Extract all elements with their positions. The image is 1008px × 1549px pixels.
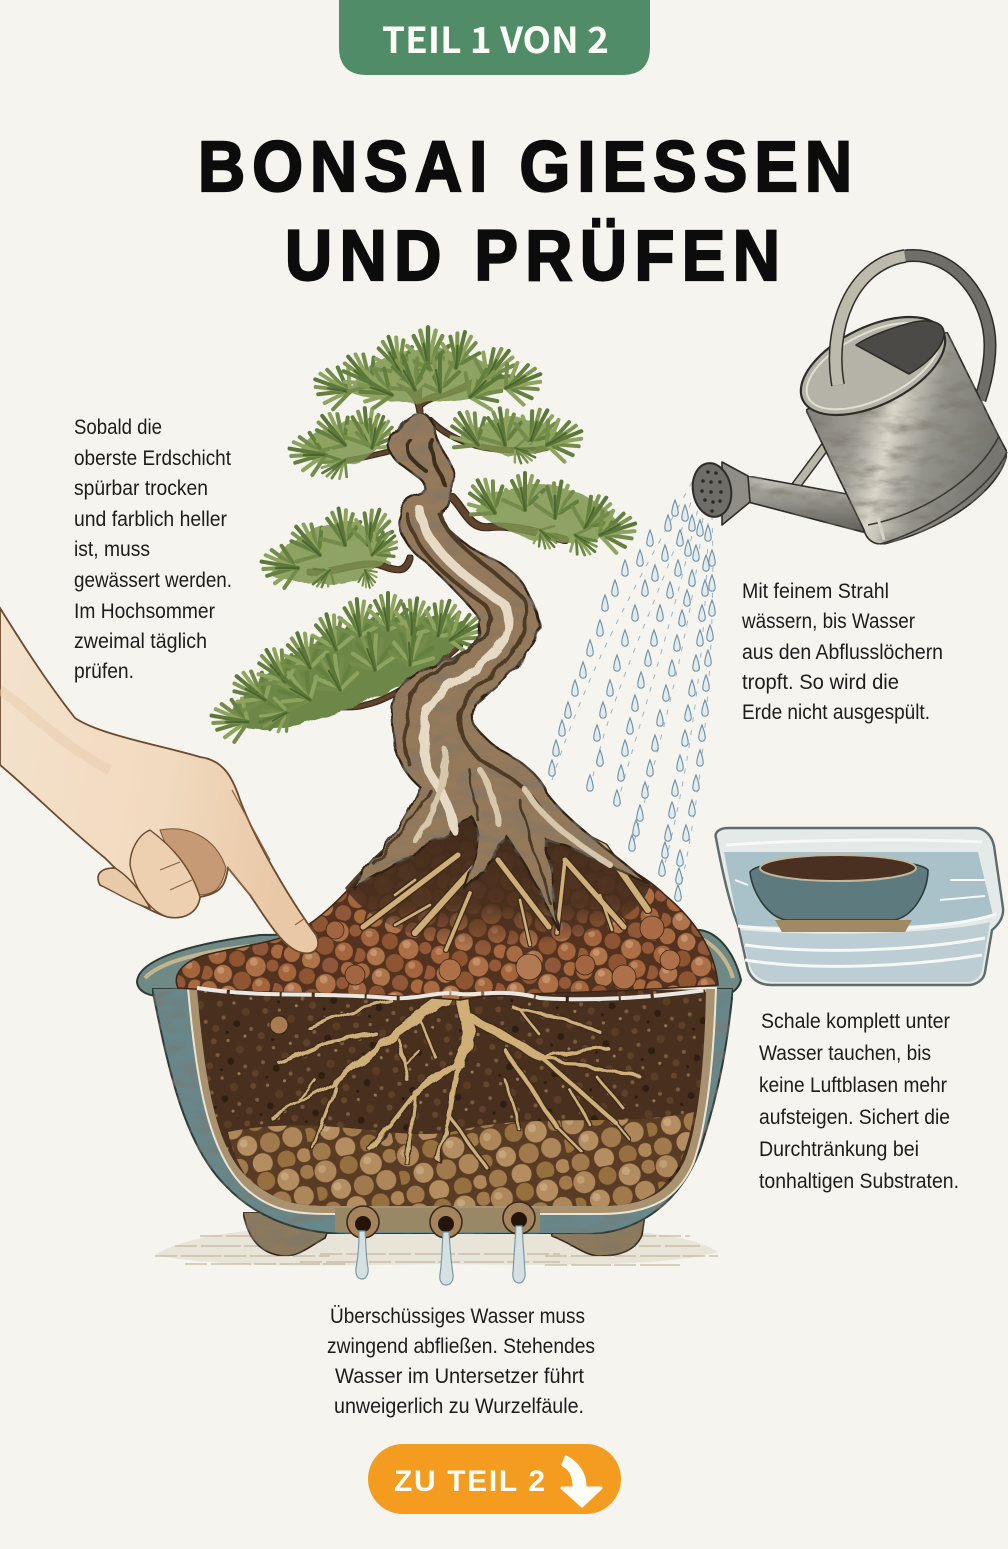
glass tray with small pot xyxy=(716,828,1003,985)
title: BONSAI GIESSEN xyxy=(198,128,852,207)
text block: when to water: Sobald die xyxy=(74,415,162,439)
bonsai tree xyxy=(208,327,650,950)
arrow icon xyxy=(562,1457,601,1506)
text block: when to water: Im Hochsommer xyxy=(74,599,215,623)
text block: immersion xyxy=(759,1009,959,1193)
can rim and opening xyxy=(786,297,960,435)
upper pebble mound xyxy=(176,800,718,1000)
text block: when to water: gewässert werden. xyxy=(74,568,232,592)
trunk bark shading xyxy=(375,440,610,905)
text block: drainage xyxy=(327,1304,595,1418)
header tab xyxy=(339,0,650,75)
text block: drainage: zwingend abfließen. Stehendes xyxy=(327,1334,595,1358)
text block: immersion: tonhaltigen Substraten. xyxy=(759,1169,959,1193)
text block: when to water: spürbar trocken xyxy=(74,476,208,500)
lower roots xyxy=(272,997,640,1167)
title xyxy=(198,128,852,296)
tray water xyxy=(724,852,993,928)
text block: immersion: aufsteigen. Sichert die xyxy=(759,1105,950,1129)
text block: fine stream xyxy=(741,579,943,724)
tray body xyxy=(716,828,1003,985)
separator mesh line xyxy=(197,988,706,999)
text block: drainage: Wasser im Untersetzer führt xyxy=(335,1364,584,1388)
water drips xyxy=(356,1226,525,1285)
text block: when to water: oberste Erdschicht xyxy=(74,446,231,470)
surface roots xyxy=(363,815,648,950)
bonsai pot xyxy=(137,800,741,1234)
can rose disc xyxy=(689,460,735,520)
can handle front xyxy=(836,256,905,385)
finger creases xyxy=(160,790,305,925)
text block: immersion: Durchtränkung bei xyxy=(759,1137,919,1161)
icon: watering can xyxy=(689,256,1007,544)
single pebble xyxy=(270,1016,288,1034)
text block: fine stream: wässern, bis Wasser xyxy=(741,609,915,633)
text block: when to water xyxy=(74,415,232,683)
text block: when to water: zweimal täglich xyxy=(74,629,207,653)
ground shadow xyxy=(155,1228,718,1265)
can rose funnel xyxy=(722,462,750,525)
pot base strip xyxy=(335,1208,540,1232)
text block: fine stream: Erde nicht ausgespült. xyxy=(742,700,930,724)
text block: immersion: Wasser tauchen, bis xyxy=(759,1041,931,1065)
text block: when to water: und farblich heller xyxy=(74,507,227,531)
title: UND PRÜFEN xyxy=(285,217,780,296)
header tab: TEIL 1 VON 2 xyxy=(382,12,609,64)
can spout xyxy=(748,476,884,536)
button: to part 2 xyxy=(368,1444,621,1514)
pot wall xyxy=(152,988,733,1234)
text block: when to water: prüfen. xyxy=(74,659,134,683)
text block: immersion: keine Luftblasen mehr xyxy=(759,1073,947,1097)
can handle back xyxy=(905,256,990,400)
text block: when to water: ist, muss xyxy=(74,537,150,561)
text block: fine stream: Mit feinem Strahl xyxy=(742,579,889,603)
can bottom ring xyxy=(868,436,1007,544)
drainage holes xyxy=(347,1202,535,1238)
pot rim xyxy=(137,930,741,996)
water shower drops xyxy=(549,482,715,901)
button: to part 2: ZU TEIL 2 xyxy=(394,1465,545,1498)
drainage layer xyxy=(228,1112,694,1206)
palm shadow xyxy=(160,829,226,895)
foliage pads xyxy=(208,327,642,744)
branches xyxy=(290,372,565,715)
text block: drainage: unweigerlich zu Wurzelfäule. xyxy=(334,1394,584,1418)
text block: fine stream: tropft. So wird die xyxy=(742,670,899,694)
curled fingers xyxy=(130,830,200,918)
soil layer xyxy=(197,990,706,1206)
text block: immersion: Schale komplett unter xyxy=(761,1009,950,1033)
dark topsoil around roots xyxy=(345,800,650,948)
trunk and flared root legs xyxy=(350,413,650,930)
small pot in tray xyxy=(750,859,928,920)
text block: drainage: Überschüssiges Wasser muss xyxy=(330,1304,585,1328)
large pebbles xyxy=(326,916,680,989)
pot feet xyxy=(243,1212,645,1256)
can body xyxy=(806,332,1007,544)
text block: fine stream: aus den Abflusslöchern xyxy=(742,640,943,664)
can brace xyxy=(795,436,833,487)
pot inner wall xyxy=(188,988,716,1214)
icon: hand testing soil xyxy=(0,608,318,953)
